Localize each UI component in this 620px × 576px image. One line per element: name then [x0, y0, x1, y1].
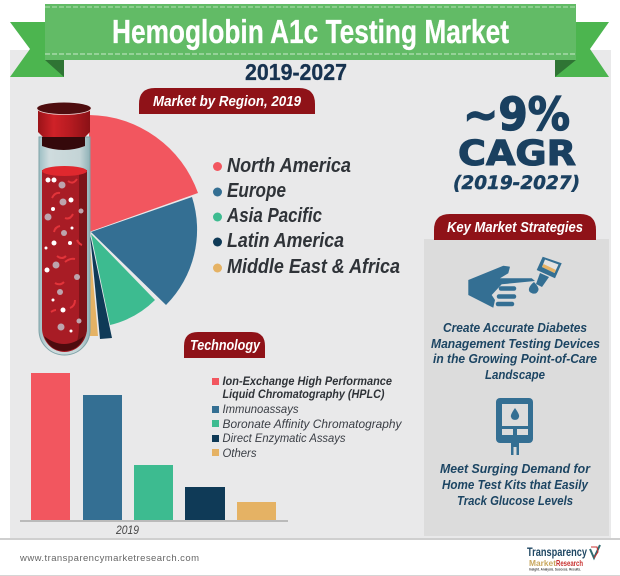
website url: www.transparencymarketresearch.com [19, 553, 199, 564]
logo: Transparency [527, 545, 587, 559]
text: meet surging demand [440, 461, 591, 508]
callout: CAGR: CAGR [458, 134, 576, 174]
bar chart: technology [20, 373, 288, 537]
subtitle years: 2019-2027 [245, 59, 347, 85]
text: create accurate diabetes: Management Testing Devices [431, 336, 600, 351]
heading: market by region: Market by Region, 2019 [153, 94, 301, 110]
heading: market by region [139, 88, 315, 114]
callout: CAGR: ~9% [463, 88, 570, 141]
legend item: HPLC [212, 374, 392, 401]
icon: glucose meter [496, 398, 533, 455]
legend item: Middle East & Africa: Middle East & Africa [227, 256, 400, 278]
text: create accurate diabetes [431, 320, 600, 382]
heading: technology [184, 332, 265, 358]
legend item: Europe: Europe [227, 180, 286, 202]
logo: Research [556, 558, 583, 568]
blood cells [44, 178, 84, 332]
legend item: Latin America: Latin America [227, 230, 344, 252]
legend item: Immunoassays: Immunoassays [222, 402, 298, 416]
pie chart: market by region [88, 115, 198, 339]
legend item: Boronate Affinity Chromatography: Boronate Affinity Chromatography [222, 417, 402, 431]
panel: key market strategies [424, 214, 609, 536]
legend item: Direct Enzymatic Assays: Direct Enzymatic Assays [222, 431, 346, 445]
legend item: North America: North America [227, 155, 351, 177]
text: meet surging demand: Meet Surging Demand for [440, 461, 591, 476]
text: meet surging demand: Track Glucose Levels [457, 493, 573, 508]
logo: Market [529, 558, 556, 568]
text: create accurate diabetes: Create Accurate Diabetes [443, 320, 587, 335]
legend item: Asia Pacific: Asia Pacific [226, 205, 322, 227]
legend item: Others: Others [222, 446, 256, 460]
icon: blood test tube [37, 102, 91, 355]
heading: technology: Technology [190, 338, 261, 354]
heading: key market strategies: Key Market Strategies [447, 220, 583, 236]
heading: key market strategies [434, 214, 596, 240]
text: create accurate diabetes: in the Growing Point-of-Care [433, 351, 597, 366]
callout: CAGR [453, 88, 580, 194]
title banner [10, 4, 609, 77]
legend: regions [213, 155, 400, 278]
legend item: HPLC: Ion-Exchange High Performance [222, 374, 392, 388]
callout: CAGR: (2019-2027) [453, 172, 580, 194]
footer [0, 538, 620, 576]
axis label: 2019 [115, 525, 140, 537]
logo [527, 545, 600, 572]
title: Hemoglobin A1c Testing Market [112, 13, 509, 50]
logo: Insight. Analysis. Success. Results. [529, 568, 581, 572]
legend item: HPLC: Liquid Chromatography (HPLC) [222, 387, 384, 401]
text: create accurate diabetes: Landscape [485, 367, 545, 382]
legend: technology [212, 374, 402, 460]
icon: hand with test device [468, 257, 562, 308]
text: meet surging demand: Home Test Kits that Easily [442, 477, 589, 492]
